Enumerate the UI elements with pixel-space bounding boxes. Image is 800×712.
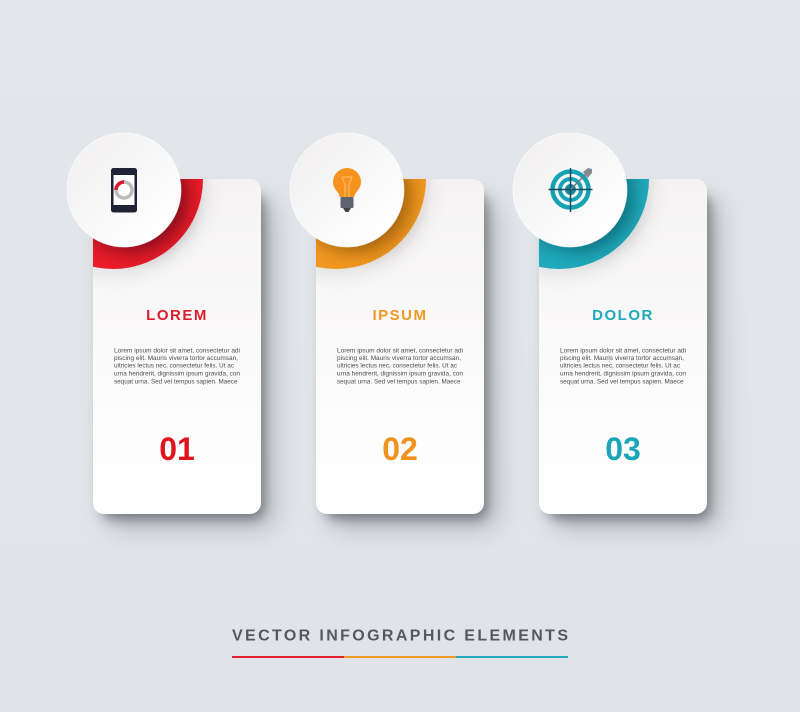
- card wide shadow: lorem: [108, 200, 274, 528]
- card wide shadow: dolor: [554, 200, 720, 528]
- disc: lorem: [67, 133, 181, 247]
- card: ipsum: [316, 179, 484, 514]
- heading: lorem: LOREM: [146, 307, 208, 324]
- text block: ipsum: [337, 348, 463, 386]
- icon: smartphone with donut chart: [111, 168, 137, 212]
- disc: ipsum: [290, 133, 404, 247]
- disc: dolor: [513, 133, 627, 247]
- text block: dolor: ultricies lectus nec, consectetur felis. Ut ac: [560, 362, 680, 370]
- card near shadow: ipsum: [325, 195, 487, 519]
- text block: ipsum: sequat urna. Sed vel tempus sapien. Maece: [337, 378, 461, 386]
- panel: ipsum: [290, 132, 508, 540]
- footer tricolor rule: [232, 656, 568, 658]
- panel: dolor: [512, 132, 732, 540]
- text block: dolor: Lorem ipsum dolor sit amet, consectetur adi: [560, 348, 686, 354]
- card near shadow: dolor: [548, 195, 710, 519]
- number: 01: 01: [159, 431, 195, 467]
- text block: lorem: sequat urna. Sed vel tempus sapien. Maece: [114, 378, 238, 386]
- text block: lorem: [114, 348, 240, 386]
- card near shadow: lorem: [102, 195, 264, 519]
- text block: lorem: piscing elit. Mauris viverra tortor accumsan,: [114, 355, 238, 362]
- text block: dolor: piscing elit. Mauris viverra tortor accumsan,: [560, 355, 684, 362]
- text block: ipsum: ultricies lectus nec, consectetur felis. Ut ac: [337, 362, 457, 370]
- heading: dolor: DOLOR: [592, 307, 654, 324]
- accent arc: teal: [539, 179, 656, 278]
- text block: dolor: [560, 348, 686, 386]
- text block: ipsum: urna hendrerit, dignissim ipsum gravida, con: [337, 370, 463, 378]
- accent arc: red: [93, 179, 210, 278]
- text block: dolor: sequat urna. Sed vel tempus sapien. Maece: [560, 378, 684, 386]
- text block: ipsum: piscing elit. Mauris viverra tortor accumsan,: [337, 355, 461, 362]
- panel: lorem: [66, 132, 286, 540]
- footer title: VECTOR INFOGRAPHIC ELEMENTS: [232, 628, 568, 644]
- card: lorem: [93, 179, 261, 514]
- icon: light bulb: [333, 168, 361, 212]
- card: dolor: [539, 179, 707, 514]
- text block: dolor: urna hendrerit, dignissim ipsum gravida, con: [560, 370, 686, 378]
- accent arc: orange: [316, 179, 432, 278]
- number: 02: 02: [382, 431, 418, 467]
- heading: ipsum: IPSUM: [372, 307, 428, 324]
- icon: target with arrow: [548, 168, 592, 212]
- text block: lorem: ultricies lectus nec, consectetur felis. Ut ac: [114, 362, 234, 370]
- text block: lorem: urna hendrerit, dignissim ipsum gravida, con: [114, 370, 240, 378]
- text block: ipsum: Lorem ipsum dolor sit amet, consectetur adi: [337, 348, 463, 354]
- card wide shadow: ipsum: [331, 200, 497, 528]
- text block: lorem: Lorem ipsum dolor sit amet, consectetur adi: [114, 348, 240, 354]
- number: 03: 03: [605, 431, 641, 467]
